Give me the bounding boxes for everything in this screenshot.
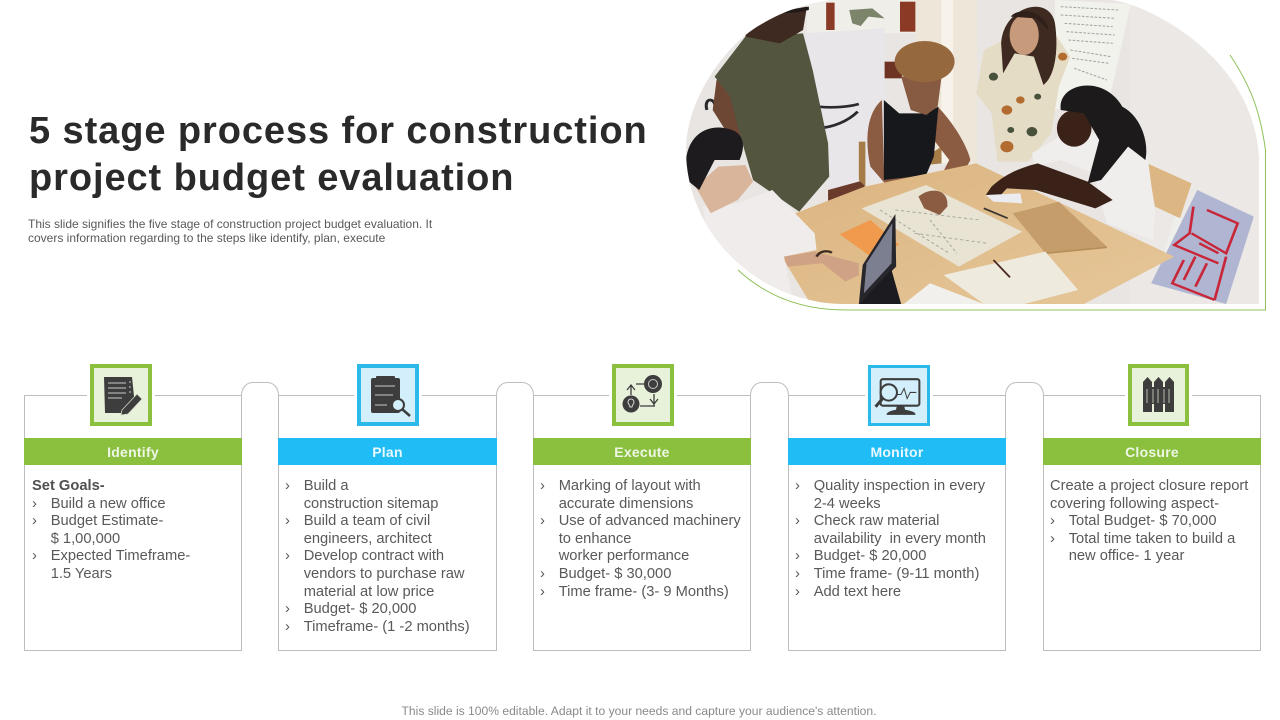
text: Plan details: Build a bbox=[304, 478, 349, 494]
left seated woman bbox=[769, 190, 816, 262]
text: Identify details: 1.5 Years bbox=[51, 566, 112, 582]
title bbox=[29, 110, 648, 199]
icon: gear and light bulb cycle bbox=[612, 364, 674, 426]
text: Execute details: Marking of layout with bbox=[559, 478, 701, 494]
text: Monitor details: Time frame- (9-11 month) bbox=[814, 566, 979, 582]
panel: Monitor bbox=[788, 365, 1006, 651]
text: Execute details: Time frame- (3- 9 Months) bbox=[559, 584, 729, 600]
text: Closure details: Create a project closure report bbox=[1050, 478, 1248, 494]
text: Identify details: Set Goals- bbox=[32, 478, 105, 494]
text: Plan details: engineers, architect bbox=[304, 531, 432, 547]
text: Closure details: Total Budget- $ 70,000 bbox=[1069, 513, 1216, 529]
text: Identify details: Expected Timeframe- bbox=[51, 548, 190, 564]
standing person in olive dress bbox=[712, 80, 741, 138]
text: Execute details: worker performance bbox=[559, 548, 689, 564]
center woman bbox=[867, 100, 912, 182]
text: Identify details bbox=[32, 478, 190, 582]
laptop bbox=[859, 214, 896, 304]
panel: Plan bbox=[278, 364, 497, 651]
text: Plan details: Build a team of civil bbox=[304, 513, 430, 529]
panel: Execute bbox=[533, 364, 751, 651]
text: Execute details: Use of advanced machinery bbox=[559, 513, 741, 529]
orange folder bbox=[840, 220, 899, 255]
text: Identify details: $ 1,00,000 bbox=[51, 531, 120, 547]
photo: team reviewing plans around a table bbox=[686, 0, 1266, 310]
icon: fence bbox=[1128, 364, 1189, 426]
envelope bbox=[1013, 202, 1107, 253]
heading: Identify bbox=[24, 438, 242, 465]
heading: Execute: Execute bbox=[614, 444, 670, 460]
text: Plan details: Timeframe- (1 -2 months) bbox=[304, 619, 470, 635]
text: Execute details bbox=[540, 478, 741, 600]
whiteboard bbox=[1055, 0, 1131, 110]
text: Closure details: new office- 1 year bbox=[1069, 548, 1184, 564]
chairs bbox=[859, 142, 865, 187]
text: Monitor details: Budget- $ 20,000 bbox=[814, 548, 926, 564]
text: Execute details: to enhance bbox=[559, 531, 631, 547]
text: Monitor details: availability in every month bbox=[814, 531, 986, 547]
text: Identify details: Budget Estimate- bbox=[51, 513, 163, 529]
text: Execute details: Budget- $ 30,000 bbox=[559, 566, 671, 582]
title: project budget evaluation bbox=[29, 157, 514, 199]
text: Identify details: Build a new office bbox=[51, 496, 166, 512]
red poster bbox=[1151, 190, 1254, 304]
heading: Execute bbox=[533, 438, 751, 465]
floral dress woman bbox=[976, 37, 1070, 162]
text: Monitor details: 2-4 weeks bbox=[814, 496, 881, 512]
text: Plan details: Budget- $ 20,000 bbox=[304, 601, 416, 617]
text: Plan details: material at low price bbox=[304, 584, 434, 600]
text: Closure details bbox=[1050, 478, 1248, 564]
heading: Monitor: Monitor bbox=[870, 444, 924, 460]
heading: Closure: Closure bbox=[1125, 444, 1179, 460]
heading: Closure bbox=[1043, 438, 1261, 465]
heading: Monitor bbox=[788, 438, 1006, 465]
panel: Identify bbox=[24, 364, 242, 651]
icon: monitor with magnifier bbox=[868, 365, 930, 426]
hand on plan bbox=[918, 191, 947, 215]
heading: Plan: Plan bbox=[372, 444, 403, 460]
heading: Plan bbox=[278, 438, 497, 465]
text: Closure details: covering following aspect- bbox=[1050, 496, 1219, 512]
description text: covers information regarding to the steps like identify, plan, execute bbox=[28, 231, 385, 245]
text: Monitor details: Add text here bbox=[814, 584, 901, 600]
description text: This slide signifies the five stage of construction project budget evaluation. It bbox=[28, 217, 432, 231]
text: Execute details: accurate dimensions bbox=[559, 496, 693, 512]
panel: Closure bbox=[1043, 364, 1261, 651]
large plan sheet bbox=[862, 185, 1022, 267]
text: Plan details: vendors to purchase raw bbox=[304, 566, 465, 582]
title: 5 stage process for construction bbox=[29, 110, 648, 152]
text: Monitor details bbox=[796, 478, 986, 600]
notebook bbox=[943, 252, 1078, 304]
icon: clipboard with magnifier bbox=[357, 364, 419, 426]
text: Monitor details: Quality inspection in every bbox=[814, 478, 985, 494]
description text bbox=[28, 217, 432, 245]
table bbox=[784, 163, 1174, 304]
icon: document with pencil bbox=[90, 364, 152, 426]
text: Plan details: construction sitemap bbox=[304, 496, 438, 512]
footer note: This slide is 100% editable. Adapt it to your needs and capture your audience's attention. bbox=[402, 704, 876, 718]
text: Closure details: Total time taken to build a bbox=[1069, 531, 1235, 547]
text: Plan details bbox=[286, 478, 470, 635]
heading: Identify: Identify bbox=[107, 444, 159, 460]
seated woman at right bbox=[1032, 134, 1152, 232]
text: Plan details: Develop contract with bbox=[304, 548, 444, 564]
text: Monitor details: Check raw material bbox=[814, 513, 939, 529]
